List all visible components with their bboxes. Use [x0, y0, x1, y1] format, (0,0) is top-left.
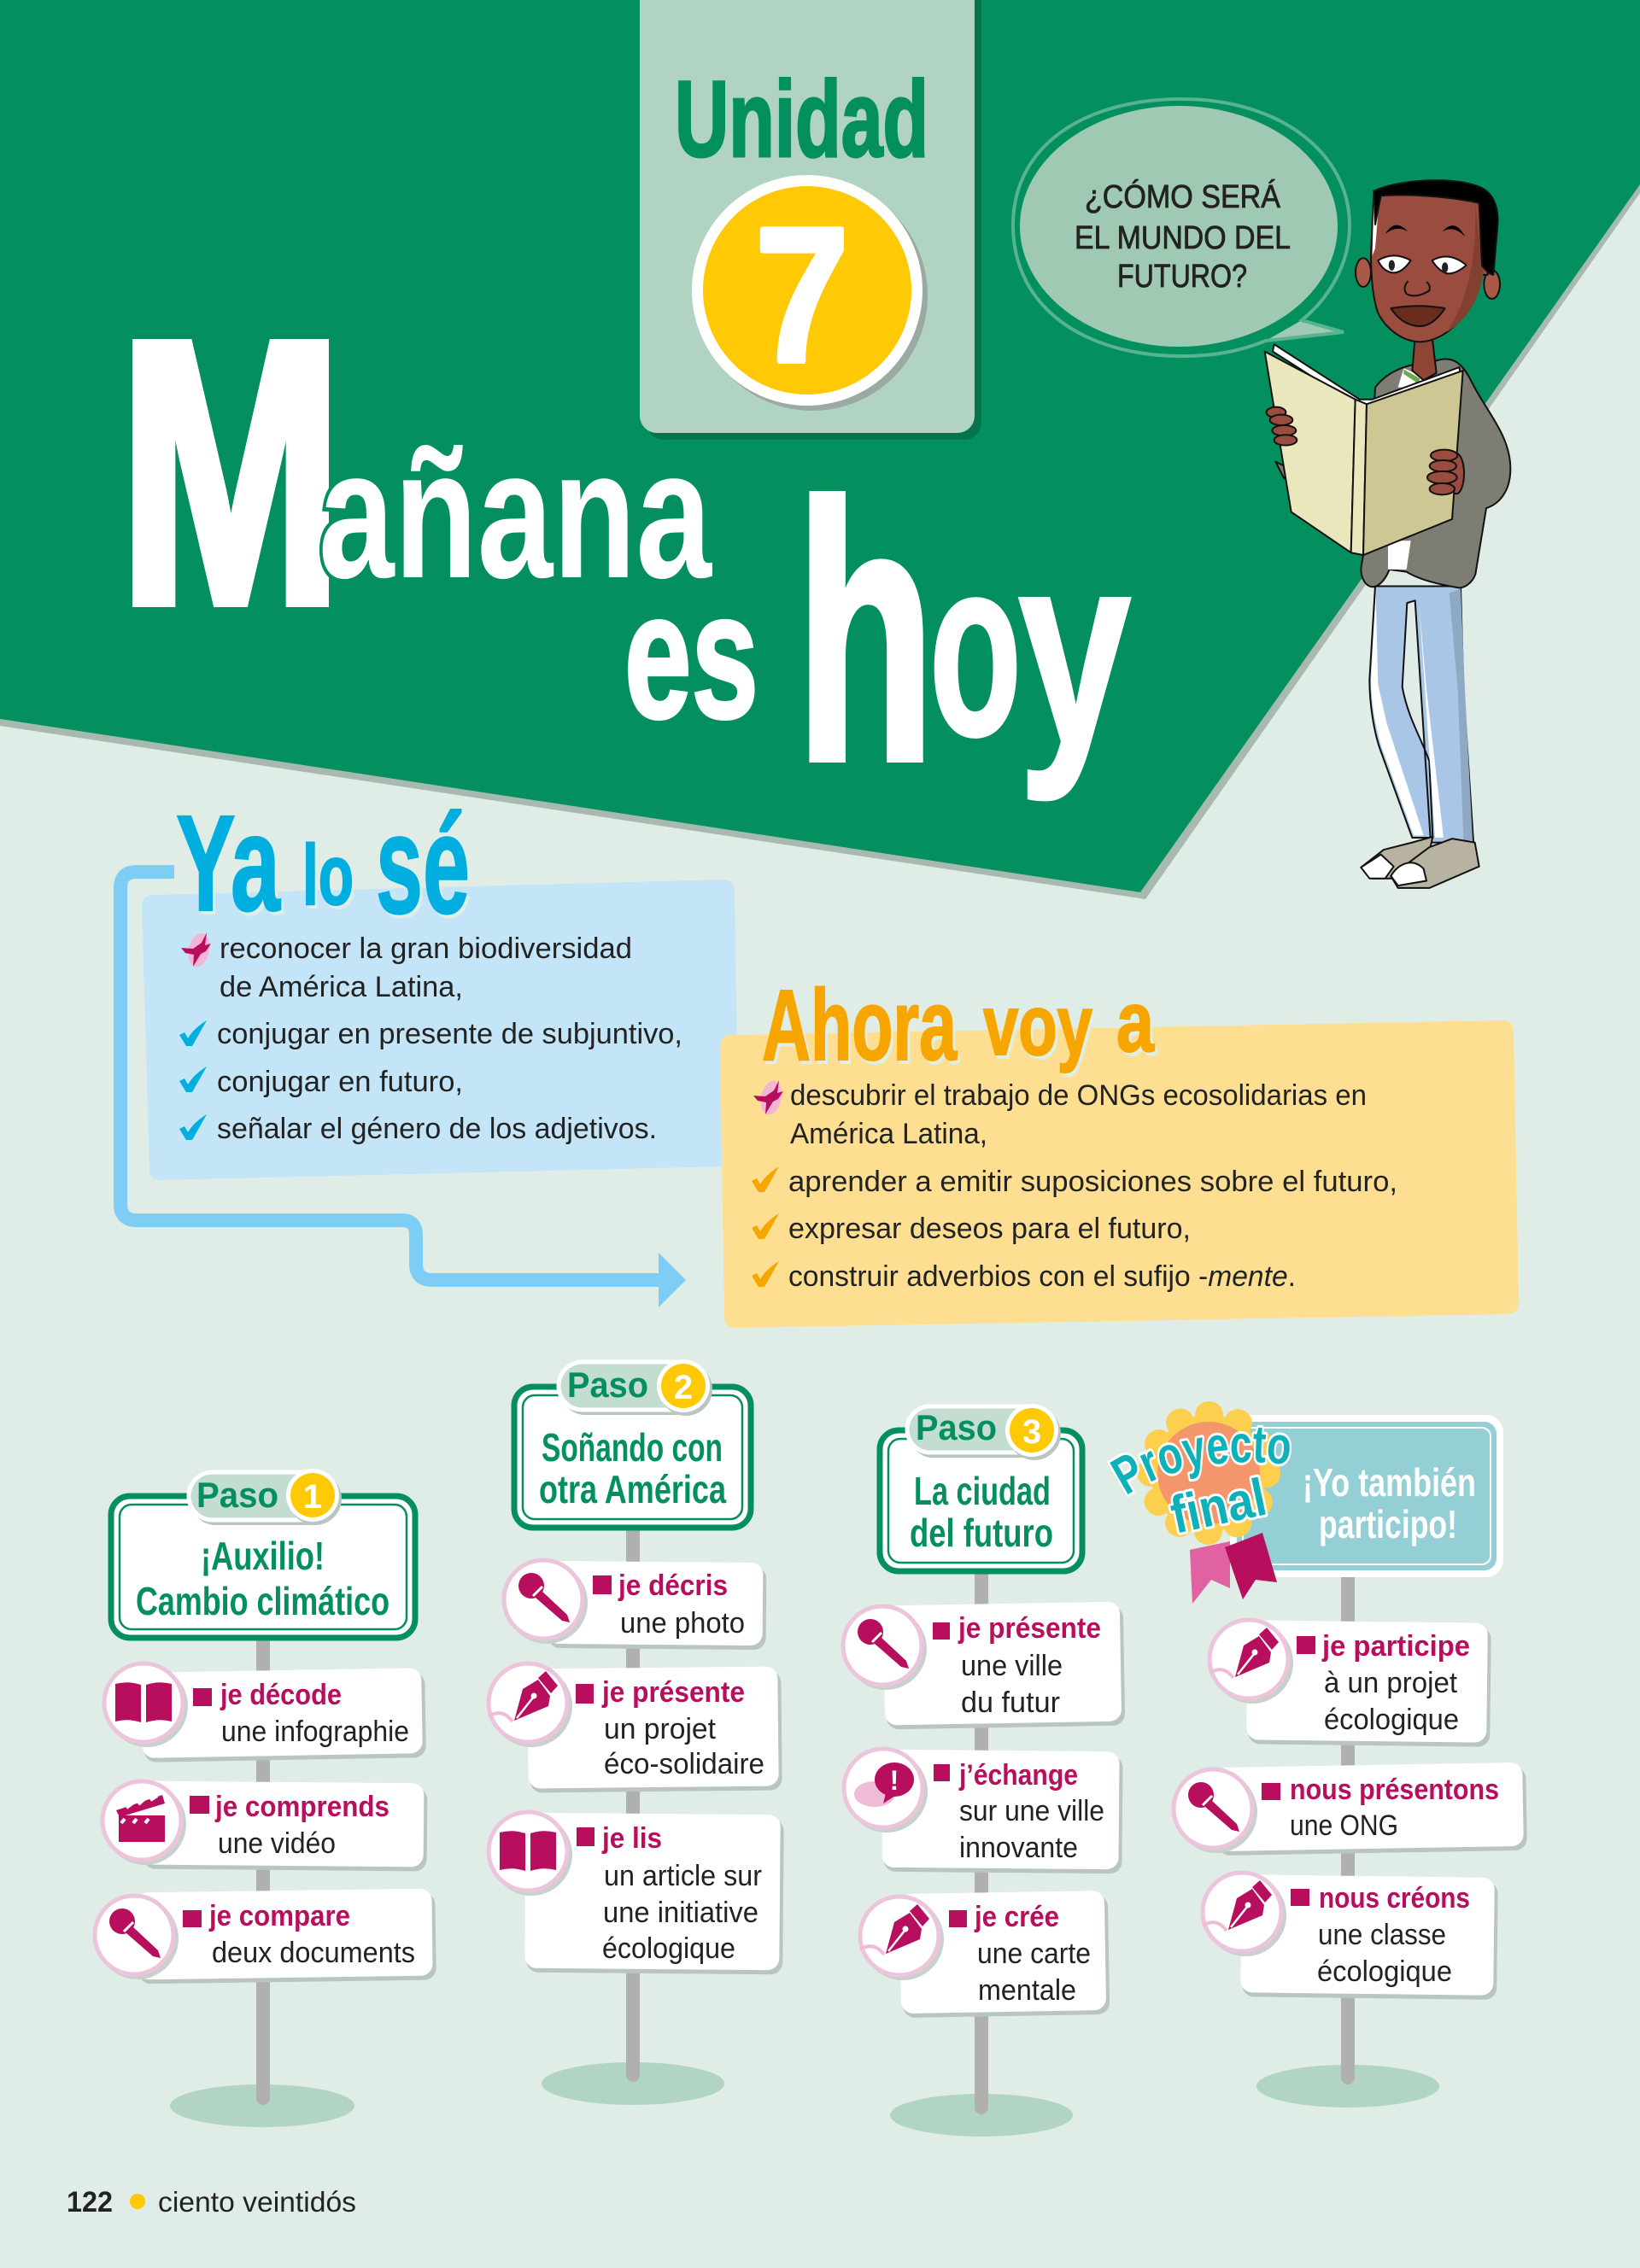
list: ahora voy a: expresar deseos para el futuro, [788, 1213, 1191, 1245]
card: nous créons: écologique [1317, 1955, 1452, 1988]
heading: ya lo sé [176, 786, 470, 943]
icon: speech bubbles: ! [890, 1765, 899, 1796]
board: paso 1 [111, 1469, 415, 1638]
list: ahora voy a [752, 1079, 1397, 1293]
card: je présente: éco-solidaire [604, 1748, 764, 1780]
main title: M [119, 265, 343, 681]
card: je comprends [102, 1781, 427, 1871]
card: je présente: une ville [961, 1650, 1063, 1682]
list: ya lo sé: conjugar en futuro, [217, 1066, 463, 1098]
signpost: paso 3 [843, 1404, 1125, 2136]
list: ahora voy a: América Latina, [790, 1118, 987, 1150]
card: je crée: une carte [977, 1938, 1091, 1970]
footer: page number [67, 2186, 356, 2218]
card: je crée [860, 1891, 1110, 2018]
board: proyecto final [1230, 1415, 1503, 1577]
board: paso 3: La ciudad [914, 1469, 1051, 1513]
panel: ya lo sé [142, 880, 739, 1180]
card: je participe: à un projet [1324, 1667, 1458, 1699]
card: je comprends: une vidéo [218, 1827, 336, 1860]
main title: es [624, 555, 758, 756]
card: je lis [489, 1812, 784, 1974]
card: je participe: écologique [1324, 1704, 1459, 1736]
list: ya lo sé: de América Latina, [220, 971, 463, 1003]
green header panel [0, 0, 1640, 899]
card: je crée: je crée [974, 1901, 1059, 1933]
card: je présente: du futur [961, 1686, 1060, 1719]
card: je présente [489, 1663, 782, 1793]
card: je compare: deux documents [212, 1937, 415, 1969]
unit tab [640, 0, 981, 440]
heading: ahora voy a: voy [983, 978, 1092, 1073]
board: paso 3: 3 [1022, 1413, 1041, 1451]
list: ya lo sé: señalar el género de los adjetivos. [217, 1113, 657, 1145]
card: nous présentons [1174, 1762, 1527, 1856]
board: proyecto final: ¡Yo también [1303, 1460, 1476, 1505]
card: nous créons: nous créons [1319, 1882, 1470, 1914]
card: je décris: je décris [618, 1569, 728, 1602]
board: paso 2: Soñando con [542, 1425, 723, 1470]
heading: ahora voy a: a [1116, 974, 1155, 1070]
main title: o [929, 506, 1022, 788]
icon: speech bubbles [854, 1762, 914, 1807]
list: ahora voy a: aprender a emitir suposiciones sobre el futuro, [788, 1166, 1397, 1198]
section: ya lo sé [120, 872, 739, 1307]
card: je décode [104, 1663, 426, 1762]
list: ahora voy a: construir adverbios con el sufijo -mente. [788, 1260, 1296, 1293]
card: j'échange [844, 1749, 1123, 1873]
card: j'échange: j’échange [958, 1759, 1078, 1792]
board: paso 2: otra América [539, 1467, 726, 1511]
card: je présente: je présente [601, 1676, 745, 1709]
card: nous créons: une classe [1318, 1919, 1446, 1951]
card: je lis: un article sur [604, 1860, 762, 1892]
card: je participe: je participe [1321, 1630, 1470, 1663]
board: paso 1: 1 [303, 1478, 322, 1516]
card: je participe [1210, 1620, 1491, 1747]
list: ya lo sé [179, 932, 682, 1145]
footer: page number: ciento veintidós [158, 2186, 356, 2218]
signpost: paso 1 [95, 1469, 436, 2127]
card: je crée: mentale [978, 1974, 1076, 2007]
heading: ya lo sé: sé [376, 786, 470, 943]
heading: ya lo sé: lo [302, 827, 354, 923]
board: proyecto final: participo! [1319, 1502, 1457, 1546]
signpost: paso 2 [489, 1359, 784, 2105]
board: paso 2: Paso [567, 1365, 648, 1405]
unit label: Unidad [675, 59, 928, 179]
board: paso 3 [880, 1404, 1082, 1571]
board: paso 1: Cambio climático [136, 1579, 390, 1623]
card: je décode: je décode [220, 1679, 342, 1711]
panel: ahora voy a [720, 1020, 1519, 1328]
card: nous créons [1203, 1873, 1498, 2000]
speech bubble [1013, 99, 1350, 356]
main title: h [796, 430, 934, 836]
card: je présente [843, 1602, 1125, 1729]
main title: y [1018, 495, 1133, 803]
footer: page number: 122 [67, 2186, 113, 2218]
card: je comprends: je comprends [214, 1791, 390, 1823]
board: paso 1: Paso [196, 1475, 278, 1515]
heading: ya lo sé: Ya [176, 786, 281, 939]
board: paso 2: 2 [674, 1369, 693, 1406]
main title: añana [319, 411, 712, 617]
board: paso 2 [514, 1359, 751, 1528]
speech bubble: ¿CÓMO SERÁ [1085, 178, 1281, 215]
board: paso 3: del futuro [910, 1511, 1053, 1555]
card: je compare: je compare [208, 1900, 350, 1932]
speech bubble: FUTURO? [1117, 259, 1247, 295]
card: je lis: une initiative [603, 1897, 758, 1929]
badge: proyecto final [1107, 1401, 1292, 1604]
board: paso 1: ¡Auxilio! [201, 1534, 325, 1578]
card: je présente: un projet [604, 1713, 717, 1745]
board: paso 3: Paso [916, 1407, 997, 1447]
heading: ahora voy a: Ahora [762, 969, 958, 1082]
speech bubble: EL MUNDO DEL [1075, 220, 1291, 256]
badge: proyecto final: final [1166, 1468, 1271, 1546]
card: je lis: je lis [601, 1822, 662, 1855]
card: je présente: je présente [958, 1612, 1101, 1645]
card: j'échange: innovante [959, 1832, 1078, 1864]
badge: proyecto final: Proyecto [1107, 1424, 1292, 1497]
card: j'échange: sur une ville [959, 1795, 1104, 1827]
card: je décris [504, 1560, 766, 1650]
main title [119, 265, 1133, 836]
card: nous présentons: nous présentons [1290, 1774, 1499, 1806]
unit number badge: 7 [755, 187, 849, 402]
list: ahora voy a: descubrir el trabajo de ONGs ecosolidarias en [790, 1079, 1367, 1112]
character: boy reading a book [1265, 180, 1510, 888]
card: nous présentons: une ONG [1290, 1809, 1398, 1842]
list: ya lo sé: reconocer la gran biodiversidad [220, 932, 632, 965]
card: je décris: une photo [620, 1607, 745, 1640]
unit number badge [692, 175, 928, 411]
signpost: proyecto final [1107, 1401, 1527, 2107]
card: je décode: une infographie [221, 1716, 409, 1748]
list: ya lo sé: conjugar en presente de subjuntivo, [217, 1018, 682, 1050]
card: je compare [95, 1889, 436, 1984]
card: je lis: écologique [602, 1932, 735, 1965]
arrow from ya lo sé to ahora voy a [120, 872, 686, 1307]
